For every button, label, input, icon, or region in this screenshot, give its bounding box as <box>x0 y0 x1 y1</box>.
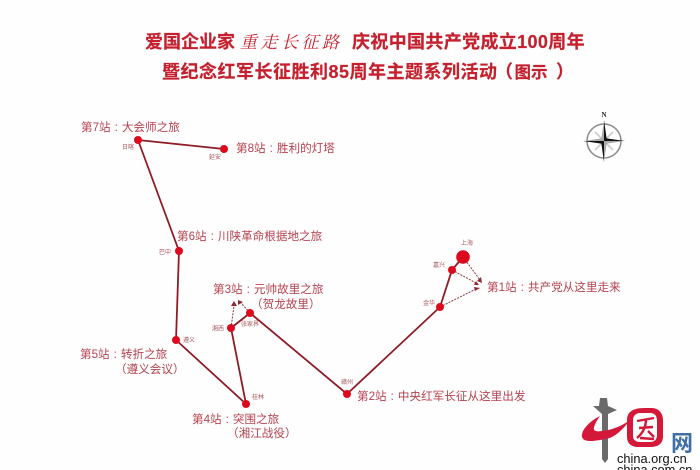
dashed arrows: station 1 <box>440 257 482 307</box>
place names: 巴中 <box>159 248 171 256</box>
icon: compass rose <box>583 111 625 162</box>
station labels <box>80 120 621 440</box>
title: ） <box>556 62 574 82</box>
title: （ <box>495 62 513 82</box>
station labels: 第5站 : 转折之旅 <box>80 347 168 361</box>
place names <box>122 143 473 401</box>
place names: 张家界 <box>241 320 259 328</box>
title <box>145 28 585 82</box>
station labels: （贺龙故里） <box>251 297 321 311</box>
title: 爱国企业家 <box>145 31 235 52</box>
place names: 赣州 <box>341 378 353 386</box>
station labels: 第3站 : 元帅故里之旅 <box>213 282 324 296</box>
logo: china.org.cn: 网 <box>671 431 693 456</box>
dashed arrows: station 3 <box>231 300 250 328</box>
station labels: 第6站 : 川陕革命根据地之旅 <box>177 229 323 243</box>
station labels: （湘江战役） <box>227 426 297 440</box>
route line <box>138 140 463 404</box>
station labels: 第2站 : 中央红军长征从这里出发 <box>357 389 526 403</box>
place names: 嘉兴 <box>433 261 445 269</box>
title: 图示 <box>514 64 548 82</box>
place names: 湘西 <box>212 324 224 332</box>
station labels: 第7站 : 大会师之旅 <box>81 120 180 134</box>
title: 暨纪念红军长征胜利85周年主题系列活动 <box>162 61 498 82</box>
station labels: （遵义会议） <box>115 362 185 376</box>
icon: compass rose: N <box>602 111 607 119</box>
station labels: 第4站 : 突围之旅 <box>192 412 280 426</box>
place names: 遵义 <box>183 336 195 344</box>
place names: 日喀 <box>122 143 134 151</box>
route nodes <box>134 136 470 408</box>
place names: 金华 <box>423 299 435 307</box>
logo: china.org.cn <box>582 398 693 470</box>
place names: 延安 <box>209 153 221 161</box>
place names: 桂林 <box>252 393 264 401</box>
place names: 上海 <box>461 239 473 247</box>
title: 重走长征路 <box>240 28 342 53</box>
station labels: 第8站 : 胜利的灯塔 <box>236 141 335 155</box>
logo: china.org.cn: china.org.cn <box>617 451 687 466</box>
title: 庆祝中国共产党成立100周年 <box>352 31 585 52</box>
station labels: 第1站 : 共产党从这里走来 <box>487 280 621 294</box>
